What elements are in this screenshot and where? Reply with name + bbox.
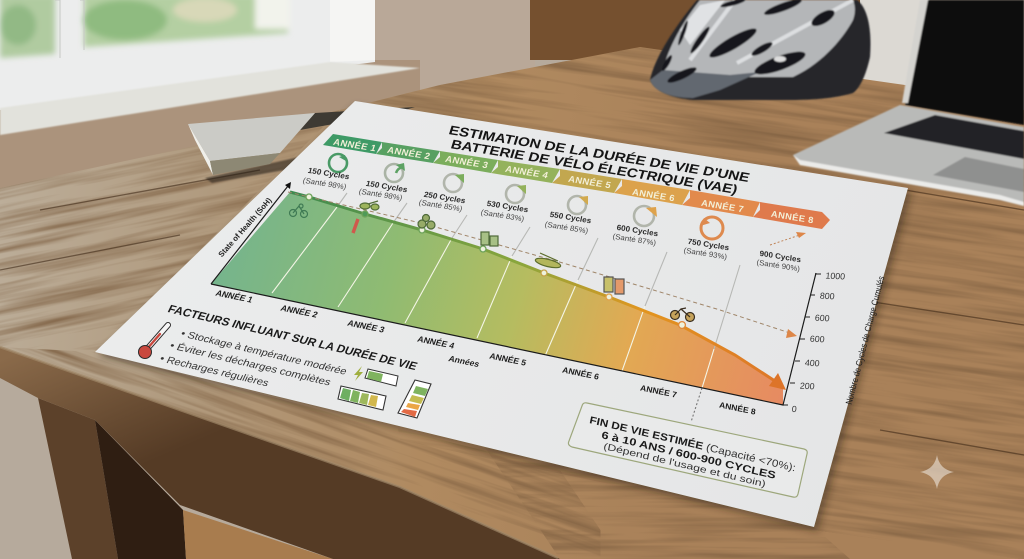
icon: two batteries: [604, 277, 624, 294]
bottom year labels: ANNÉE 3: [346, 317, 387, 335]
window garden view: [0, 0, 290, 58]
icon: thermometer: [138, 325, 168, 358]
right axis ticks: [783, 274, 821, 405]
ribbon labels: ANNÉE 2: [386, 145, 432, 161]
ribbon labels: ANNÉE 4: [504, 164, 550, 180]
icon: low battery: [365, 369, 398, 386]
icon: lightning: [354, 366, 363, 381]
cycle gauges: [329, 154, 723, 239]
right axis title: Nombre de Cycles de Charge Cumulés: [844, 275, 887, 406]
icon: cyclist: [290, 204, 308, 218]
health curve: [290, 192, 778, 383]
cycle labels: (Santé 90%): [756, 258, 801, 273]
factors list: [158, 329, 349, 389]
factors section: [138, 303, 431, 418]
cycle labels: 150 Cycles: [307, 166, 351, 181]
ribbon labels: ANNÉE 8: [770, 209, 815, 225]
title: BATTERIE DE VÉLO ÉLECTRIQUE (VAE): [449, 137, 740, 197]
cycle labels: (Santé 98%): [358, 187, 404, 202]
right axis numbers: 600: [809, 334, 825, 344]
ribbon labels: [332, 137, 815, 225]
right axis numbers: 1000: [825, 271, 846, 281]
factors list: • Éviter les décharges complètes: [168, 341, 332, 388]
right axis numbers: 0: [791, 404, 797, 414]
cycle labels: 550 Cycles: [549, 210, 593, 225]
cycle labels: 530 Cycles: [486, 199, 530, 214]
bottom year labels: Années: [447, 353, 481, 369]
factors heading: FACTEURS INFLUANT SUR LA DURÉE DE VIE: [166, 303, 420, 373]
bottom year labels: ANNÉE 6: [561, 364, 601, 382]
bottom year labels: ANNÉE 8: [719, 399, 757, 417]
cycle labels: (Santé 93%): [683, 246, 728, 261]
ribbon labels: ANNÉE 7: [700, 198, 745, 214]
ribbon labels: ANNÉE 5: [567, 173, 613, 190]
chart icons: [290, 201, 694, 322]
curve markers: [306, 194, 685, 328]
icon: wheels: [418, 214, 435, 229]
title: [447, 123, 752, 197]
callout: estimated end of life: 6 à 10 ANS / 600-900 CYCLES: [600, 430, 777, 482]
cycle labels: 250 Cycles: [423, 190, 467, 205]
factors list: • Recharges régulières: [158, 354, 270, 389]
factors list: • Stockage à température modérée: [179, 329, 349, 378]
window frame: [0, 0, 375, 110]
bike helmet: [650, 0, 870, 100]
paper shadow: [99, 106, 912, 532]
bottom year labels: ANNÉE 1: [214, 288, 255, 305]
cycle labels: 900 Cycles: [759, 249, 802, 264]
icon: bike year 2: [360, 201, 379, 210]
ribbon labels: ANNÉE 1: [332, 137, 378, 153]
left axis: [211, 186, 816, 405]
cycle labels: (Santé 85%): [544, 220, 589, 235]
table front edge and leg: [0, 347, 560, 559]
window sill: [0, 62, 420, 135]
capacity area chart: [211, 182, 887, 422]
cycle labels: 750 Cycles: [687, 237, 730, 252]
bottom year labels: ANNÉE 7: [639, 383, 678, 400]
sparkle watermark: [920, 455, 954, 489]
ribbon labels: ANNÉE 3: [444, 154, 490, 170]
cycle labels: (Santé 85%): [418, 198, 464, 213]
year grid lines: [272, 193, 740, 422]
bottom year labels: [214, 288, 757, 417]
right axis numbers: [791, 271, 846, 414]
title: ESTIMATION DE LA DURÉE DE VIE D'UNE: [447, 123, 752, 185]
callout: estimated end of life: (Dépend de l'usage et du soin): [602, 441, 767, 490]
bottom year labels: ANNÉE 4: [416, 333, 456, 351]
cycle labels: 150 Cycles: [365, 179, 409, 194]
cycle labels: (Santé 98%): [302, 176, 348, 191]
cycle labels: 600 Cycles: [616, 223, 659, 238]
right axis numbers: 600: [814, 313, 830, 323]
callout: estimated end of life: FIN DE VIE ESTIMÉE (Capacité <70%):: [588, 413, 797, 474]
icon: bicycle: [670, 308, 694, 322]
icon: vertical battery: [398, 380, 431, 418]
right axis numbers: 200: [799, 381, 815, 391]
infographic sheet: [95, 101, 908, 527]
right axis numbers: 400: [804, 358, 820, 368]
laptop: [793, 0, 1024, 206]
icon: thermometer small: [353, 219, 358, 233]
projected dashed line: [288, 192, 790, 333]
cycle labels: (Santé 87%): [612, 232, 657, 247]
icon: full horizontal battery: [338, 386, 386, 410]
callout: estimated end of life: [568, 403, 807, 497]
timeline ribbon: [323, 134, 830, 229]
bottom year labels: ANNÉE 2: [279, 303, 320, 320]
icon: shoes: [535, 253, 561, 270]
icon: battery pack: [481, 232, 498, 246]
cycle labels: [302, 166, 802, 273]
notebook: [188, 107, 415, 183]
right axis numbers: 800: [819, 291, 835, 301]
cycle labels: (Santé 83%): [480, 208, 525, 223]
bottom year labels: ANNÉE 5: [488, 351, 528, 368]
year 8 dotted arrow: [770, 232, 806, 245]
ribbon labels: ANNÉE 6: [631, 187, 676, 203]
left axis title: State of Health (SoH): [217, 196, 274, 259]
